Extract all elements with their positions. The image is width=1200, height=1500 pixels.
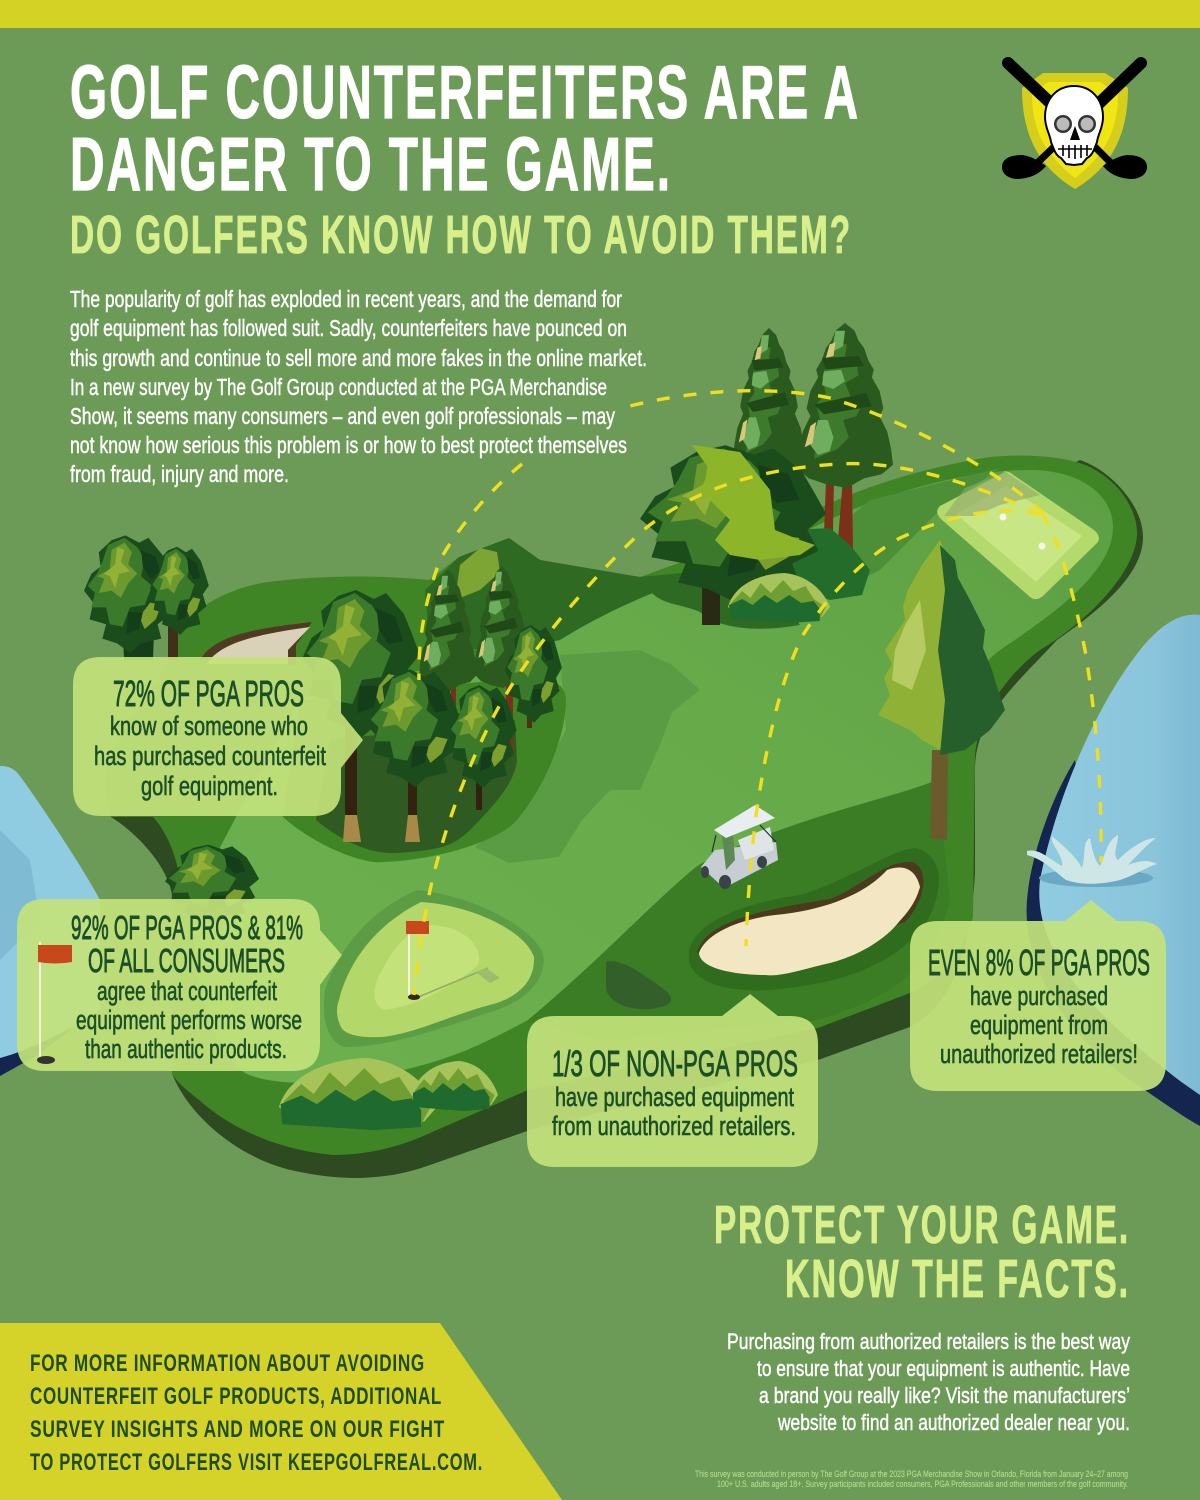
callout: 92% of PGA pros and 81% of consumers: OF ALL CONSUMERS <box>88 942 285 979</box>
shot path: arc to water <box>1042 513 1101 862</box>
top bar <box>0 0 1200 28</box>
icon: skull and crossed clubs logo <box>1002 63 1147 189</box>
intro text: this growth and continue to sell more and more fakes in the online market. <box>70 345 647 371</box>
fairway <box>190 470 1113 1083</box>
hill highlight <box>455 548 500 600</box>
intro text: The popularity of golf has exploded in recent years, and the demand for <box>70 286 622 312</box>
shot path: long arc into trees <box>419 464 522 680</box>
title: DANGER TO THE GAME. <box>70 122 672 206</box>
hole flag <box>406 921 429 1000</box>
intro text: not know how serious this problem is or how to best protect themselves <box>70 432 627 458</box>
callout: 72% of PGA pros: know of someone who <box>110 711 308 741</box>
panel: more information <box>0 1323 562 1500</box>
trees: right tree <box>878 540 1005 840</box>
right water hazard <box>1027 615 1200 1126</box>
big tree ground shade <box>647 573 800 629</box>
tree shadow on fairway <box>475 650 700 863</box>
shot path: arc to bunker <box>746 511 1040 946</box>
heading: protect your game <box>714 1195 1130 1309</box>
course edge shadow <box>111 460 1143 1178</box>
callout: 92% of PGA pros and 81% of consumers: equipment performs worse <box>76 1005 302 1035</box>
upper fairway shadow <box>840 468 1000 590</box>
callout: 72% of PGA pros <box>73 657 363 816</box>
lower right band <box>528 780 950 1040</box>
callout: 92% of PGA pros and 81% of consumers <box>17 899 342 1071</box>
callout: even 8% of PGA pros <box>910 900 1166 1091</box>
trees: large broadleaf <box>640 445 870 625</box>
bushes: lower left <box>279 1058 498 1130</box>
trees: top left cluster <box>84 535 209 660</box>
shot path: arc to hole <box>414 464 1040 995</box>
callout: 1/3 of non-PGA pros: 1/3 OF NON-PGA PROS <box>552 1043 798 1084</box>
panel: more information: FOR MORE INFORMATION ABOUT AVOIDING <box>30 1350 425 1377</box>
golf course <box>105 456 1143 1178</box>
course turf <box>105 456 1137 1155</box>
intro text: from fraud, injury and more. <box>70 461 289 487</box>
bunker rough <box>689 848 939 990</box>
tee box <box>937 471 1099 599</box>
callout: 72% of PGA pros: golf equipment. <box>141 771 278 801</box>
shot path: long arc from tee <box>622 391 1043 513</box>
callout: even 8% of PGA pros: equipment from <box>970 1010 1108 1040</box>
icon: flag <box>37 942 72 1064</box>
title <box>70 50 860 206</box>
sand bunker <box>699 867 920 975</box>
trees: top conifers <box>733 323 893 552</box>
tree hollow <box>283 676 566 862</box>
hole green <box>337 902 534 1037</box>
panel: more information: TO PROTECT GOLFERS VISIT KEEPGOLFREAL.COM. <box>30 1449 483 1476</box>
bunker rim <box>697 862 923 953</box>
intro text: In a new survey by The Golf Group conducted at the PGA Merchandise <box>70 374 607 400</box>
hill shade <box>425 538 735 650</box>
trees: bottom left tree <box>165 845 259 923</box>
callout: 92% of PGA pros and 81% of consumers: than authentic products. <box>85 1034 287 1064</box>
footnote <box>695 1469 1128 1490</box>
intro text: golf equipment has followed suit. Sadly, counterfeiters have pounced on <box>70 315 627 341</box>
callout: 1/3 of non-PGA pros: from unauthorized retailers. <box>552 1111 796 1141</box>
left edge shadow band <box>111 817 180 897</box>
callout: even 8% of PGA pros: have purchased <box>970 981 1108 1011</box>
callout: 72% of PGA pros: has purchased counterfeit <box>94 741 326 771</box>
flag shadow <box>416 968 500 998</box>
shot paths <box>414 391 1101 995</box>
panel: more information: SURVEY INSIGHTS AND MORE ON OUR FIGHT <box>30 1416 445 1443</box>
callout: 1/3 of non-PGA pros: have purchased equipment <box>555 1082 794 1112</box>
bush near trees <box>728 573 830 623</box>
intro text <box>70 286 647 487</box>
callout: 92% of PGA pros and 81% of consumers: 92% OF PGA PROS & 81% <box>71 909 303 946</box>
small hazard mound <box>606 961 671 1009</box>
left water hazard <box>0 766 100 1076</box>
water splash <box>1027 835 1157 887</box>
tree hollow shade <box>316 720 517 853</box>
callout: 92% of PGA pros and 81% of consumers: agree that counterfeit <box>97 976 277 1006</box>
golf cart <box>701 805 778 889</box>
hole green ring <box>324 890 544 1047</box>
callout: 72% of PGA pros: 72% OF PGA PROS <box>113 673 304 714</box>
protect text <box>727 1329 1130 1435</box>
left bunker <box>200 622 312 665</box>
panel: more information: COUNTERFEIT GOLF PRODUCTS, ADDITIONAL <box>30 1383 442 1410</box>
green center <box>374 925 479 1010</box>
callout: 1/3 of non-PGA pros <box>527 994 818 1167</box>
intro text: Show, it seems many consumers – and even golf professionals – may <box>70 403 615 429</box>
trees: centre grove <box>302 566 562 842</box>
callout: even 8% of PGA pros: unauthorized retailers! <box>940 1039 1138 1069</box>
